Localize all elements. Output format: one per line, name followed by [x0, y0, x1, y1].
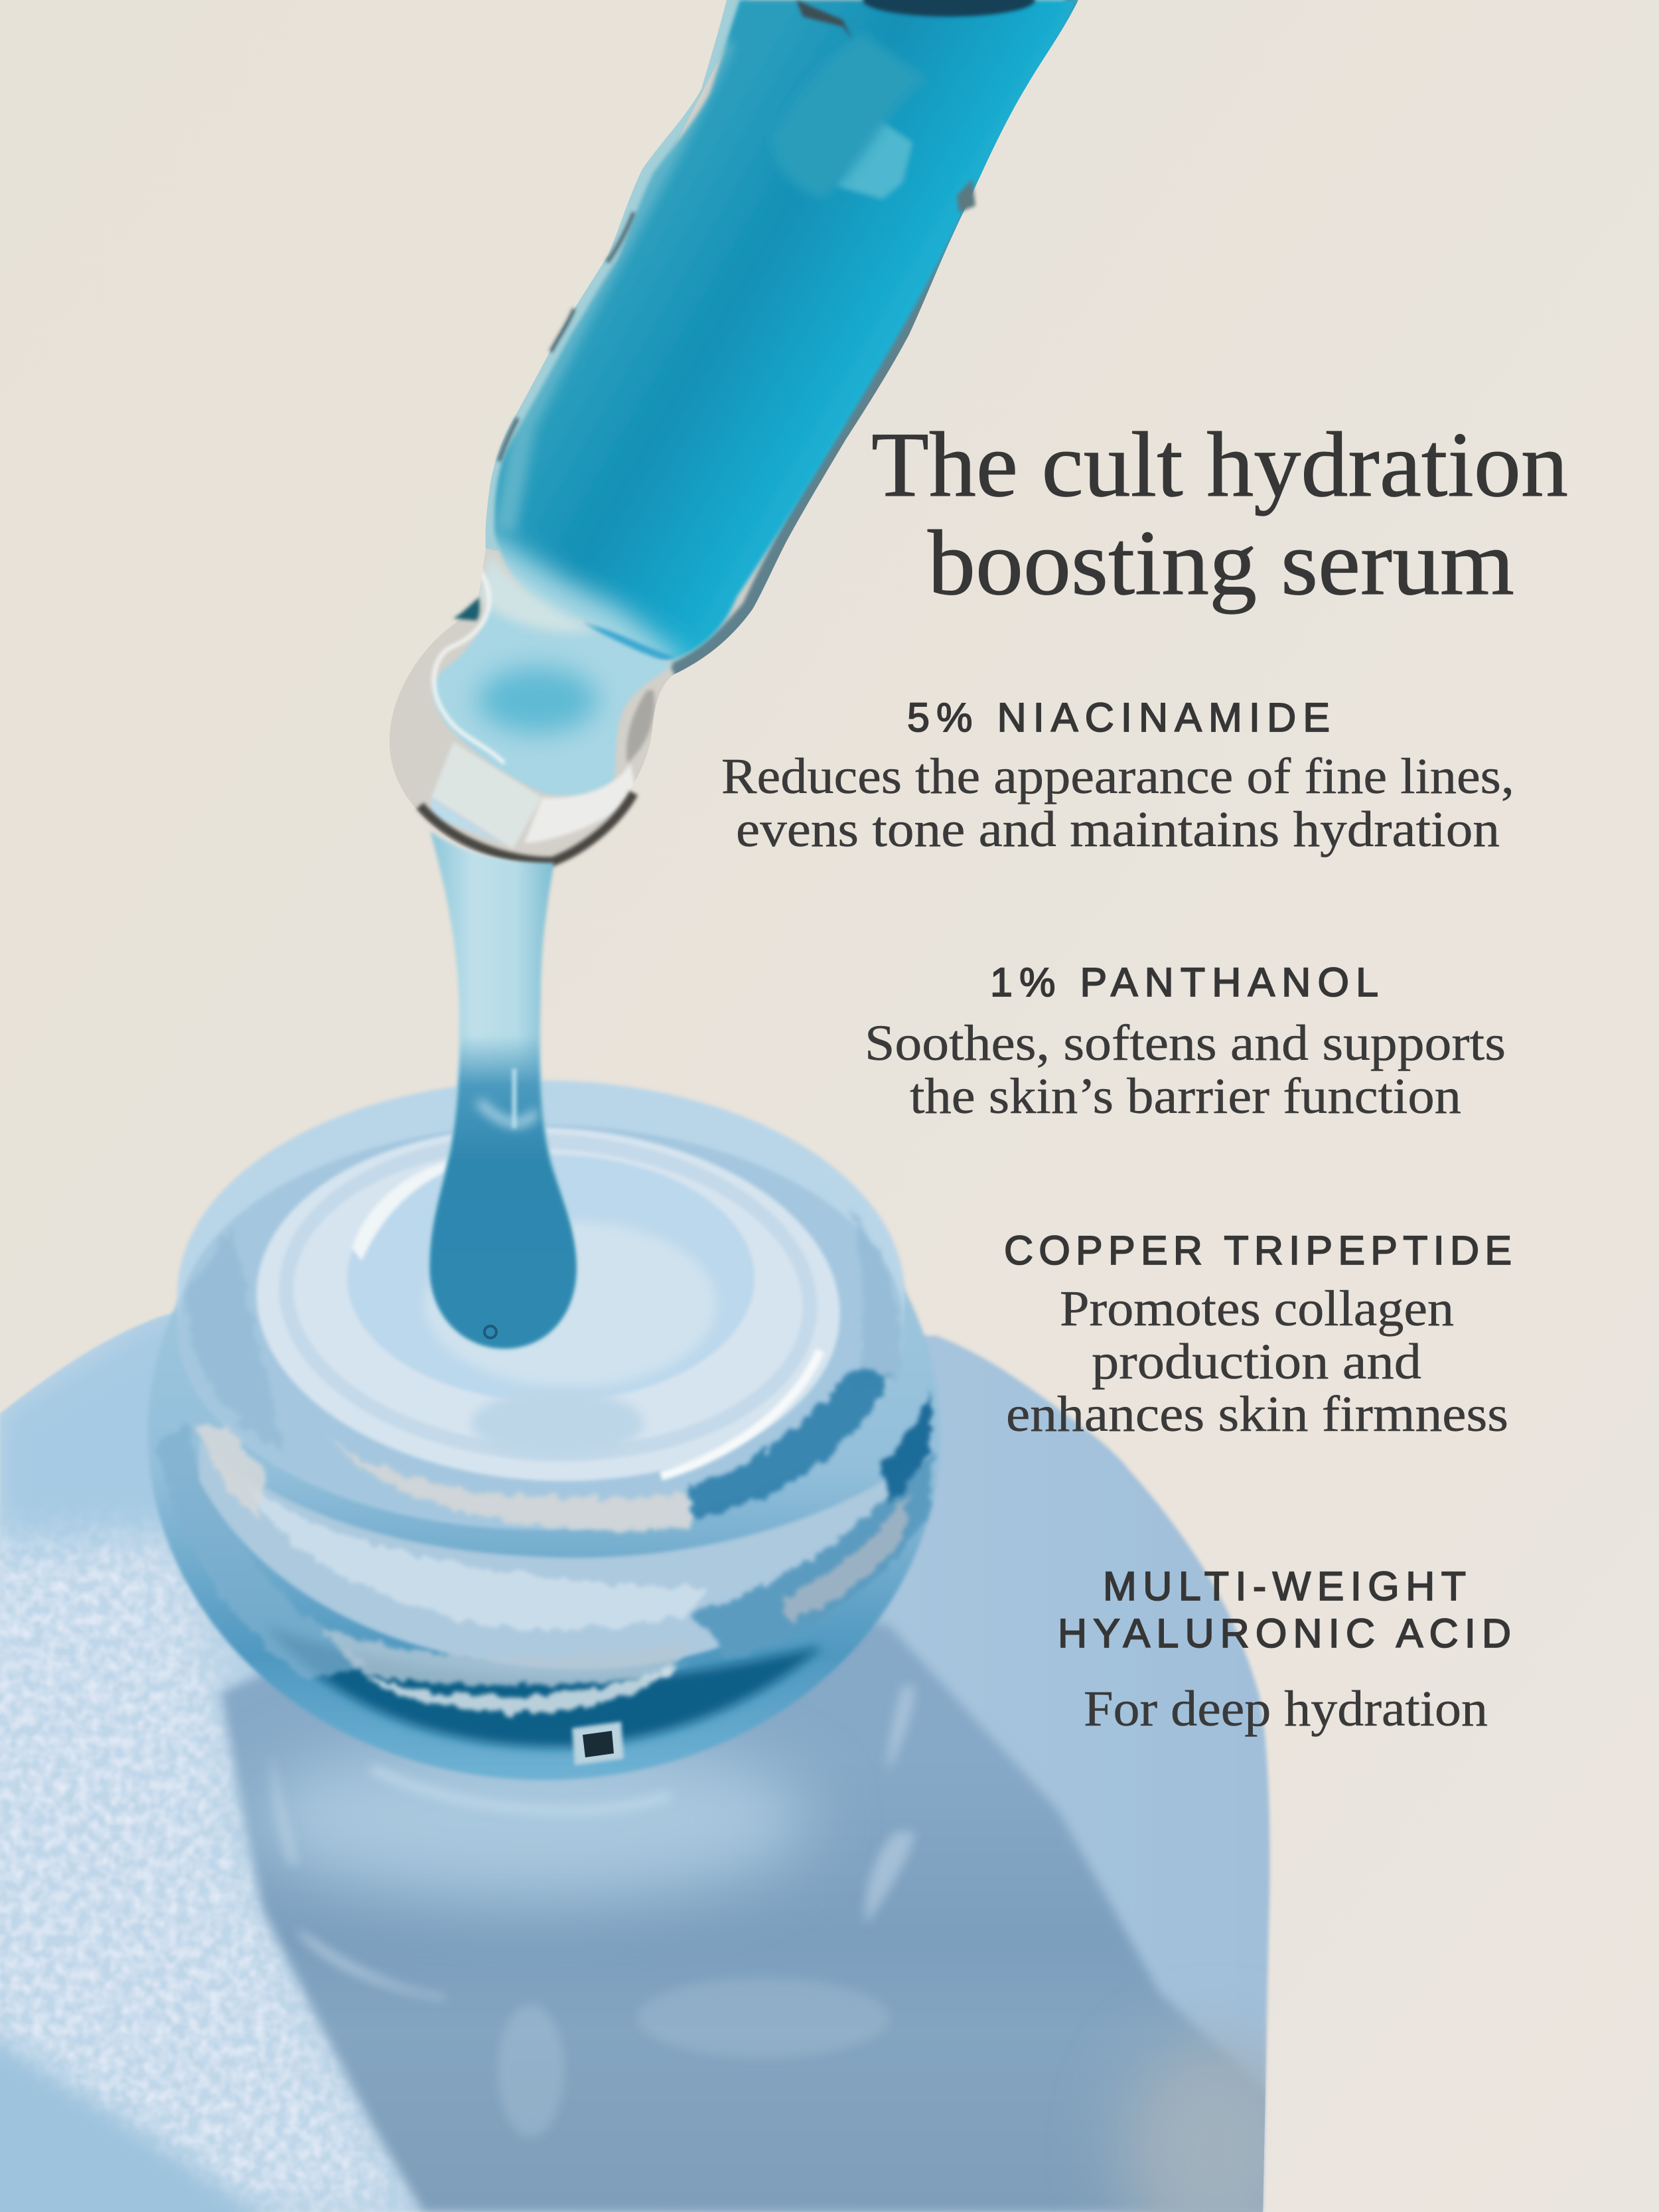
- ingredient: niacinamide: 5% NIACINAMIDE: [907, 695, 1330, 740]
- reflections in shadow: [271, 1686, 916, 2137]
- pale tube wall: [465, 0, 750, 551]
- upper-left shoulder tone: [0, 1313, 172, 1550]
- small pool on ring: [471, 1390, 644, 1457]
- drop highlight: [479, 1102, 536, 1123]
- serum in tube: [465, 0, 1095, 690]
- notch on right edge: [957, 179, 975, 212]
- frosted white ring: [248, 1112, 849, 1496]
- bright arc of ring: [661, 1351, 820, 1476]
- ingredient: copper tripeptide: enhances skin firmness: [1006, 1386, 1508, 1442]
- ingredient: panthanol: 1% PANTHANOL: [990, 960, 1378, 1005]
- neck lower band: [148, 1087, 940, 1780]
- left edge dark streaks: [499, 212, 634, 461]
- glass neck of bottle: [148, 1080, 940, 1810]
- dark rim at bulb base: [420, 793, 634, 861]
- drop: [430, 1035, 576, 1349]
- ingredient: hyaluronic acid: For deep hydration: [1084, 1681, 1488, 1737]
- pipette: [372, 0, 1102, 876]
- serum stream: [430, 831, 576, 1349]
- lower-left bottle shade: [0, 2024, 292, 2212]
- left mottled rim: [186, 1228, 285, 1453]
- left pale edge: [504, 40, 723, 531]
- highlight around bulb: [524, 763, 637, 843]
- pale neck of serum: [465, 524, 690, 690]
- inner opening: [347, 1155, 755, 1402]
- title: [871, 413, 1568, 615]
- ingredient: panthanol: Soothes, softens and supports: [865, 1015, 1506, 1071]
- ingredient: hyaluronic acid: [1058, 1564, 1511, 1737]
- ingredient: copper tripeptide: Promotes collagen: [1060, 1281, 1454, 1337]
- shadow cast by neck: [220, 1560, 1277, 2212]
- glass edge shade: [674, 0, 1078, 674]
- dark flecks on right of rim: [688, 1367, 889, 1520]
- ingredient: panthanol: the skin’s barrier function: [910, 1069, 1461, 1124]
- ridge light band: [199, 1440, 916, 1669]
- right dark reflections: [690, 1453, 932, 1659]
- left silver fragment: [193, 1425, 265, 1520]
- mottled lower ridge: [319, 1626, 690, 1686]
- white bulb line: [434, 571, 504, 763]
- dark top of pipette inner: [863, 0, 1035, 17]
- title: The cult hydration: [871, 413, 1568, 516]
- light glow below neck: [252, 1739, 810, 1898]
- bottle body: [0, 1307, 1307, 2212]
- right mottled rim: [849, 1208, 900, 1387]
- ingredient: niacinamide: [721, 695, 1514, 857]
- ingredient: panthanol: [865, 960, 1506, 1124]
- left neck shading: [156, 1427, 372, 1679]
- dark base band: [265, 1626, 823, 1747]
- lower-right grey shade: [1121, 2037, 1307, 2212]
- ingredient: niacinamide: Reduces the appearance of fine lines,: [721, 749, 1514, 804]
- pale serum in bulb: [433, 571, 674, 796]
- rim silver band: [325, 1434, 693, 1530]
- ingredient: niacinamide: evens tone and maintains hydration: [736, 802, 1500, 857]
- ingredient: copper tripeptide: production and: [1092, 1334, 1421, 1390]
- arc under neck: [372, 1769, 670, 1810]
- dark crevice on neck: [453, 597, 480, 621]
- shimmer area on bottle shoulder: [0, 1540, 411, 2212]
- air bubble: [484, 1326, 496, 1338]
- right glass sliver: [626, 690, 654, 763]
- white band of ridge: [243, 1481, 710, 1630]
- top glass ring: [177, 1080, 904, 1508]
- ingredient: hyaluronic acid: MULTI-WEIGHT: [1103, 1564, 1466, 1609]
- clear glass wedge: [431, 742, 542, 849]
- glass label notch: [572, 1722, 624, 1765]
- glass tube silhouette: [372, 0, 1102, 876]
- deep blue underside patch: [582, 623, 675, 662]
- title: boosting serum: [928, 512, 1514, 615]
- upper neck pale: [478, 551, 597, 632]
- ingredient: hyaluronic acid: HYALURONIC ACID: [1058, 1611, 1511, 1656]
- teal core of bulb: [478, 667, 597, 733]
- ingredient: copper tripeptide: [1004, 1228, 1512, 1442]
- ingredient: copper tripeptide: COPPER TRIPEPTIDE: [1004, 1228, 1512, 1273]
- refraction patch: [836, 113, 912, 199]
